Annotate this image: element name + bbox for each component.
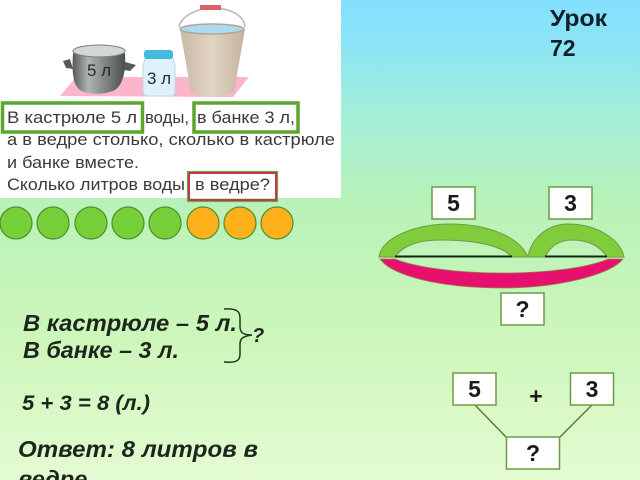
lesson title: Урок: [550, 5, 608, 31]
plus sign: +: [529, 383, 543, 409]
highlight: pot quantity: [2, 103, 142, 132]
task text: в банке 3 л,: [197, 108, 295, 127]
highlight: bucket question: [188, 172, 278, 202]
task text: воды,: [145, 108, 189, 127]
diagram: number bond: [453, 373, 614, 469]
highlight: jar quantity: [194, 103, 298, 132]
panel: task illustration and text: [0, 0, 341, 202]
icon: pot: [63, 45, 136, 94]
box 5: 5: [468, 376, 481, 402]
task text: в ведре?: [195, 175, 270, 194]
solution text: [23, 310, 237, 363]
box 5: 5: [447, 190, 460, 216]
lesson title: 72: [550, 35, 576, 61]
solution text: В банке – 3 л.: [23, 337, 179, 363]
task text: и банке вместе.: [7, 153, 139, 172]
box 5: [432, 187, 475, 219]
circles counting row: [0, 207, 293, 239]
diagram: segment scheme: [379, 187, 624, 325]
brace with question mark: ?: [252, 325, 264, 347]
connector lines: [475, 405, 592, 437]
left arc: [379, 224, 528, 257]
icon: bucket: [179, 5, 245, 97]
task text: В кастрюле 5 л: [7, 108, 137, 127]
solution text: В кастрюле – 5 л.: [23, 310, 237, 336]
lesson title: [550, 5, 608, 61]
box 3: 3: [564, 190, 577, 216]
task text: а в ведре столько, сколько в кастрюле: [7, 130, 335, 149]
equation: 5 + 3 = 8 (л.): [22, 392, 150, 415]
box question: [506, 437, 560, 469]
box 3: 3: [586, 376, 598, 402]
box 3: [549, 187, 592, 219]
segment lines: [395, 256, 607, 258]
icon: jar: [143, 50, 175, 96]
pink total arc: [380, 259, 623, 288]
icon: jar: 3 л: [147, 69, 171, 88]
pink table surface: [60, 77, 249, 97]
task text: Сколько литров воды: [7, 175, 185, 194]
answer text: [18, 436, 258, 480]
icon: pot: 5 л: [87, 61, 111, 80]
brace with question mark: [224, 309, 264, 362]
box 5: [453, 373, 496, 405]
box question: [501, 293, 544, 325]
task text: [7, 108, 335, 194]
box question: ?: [526, 440, 540, 466]
right arc: [528, 224, 624, 257]
box question: ?: [515, 296, 530, 322]
answer text: Ответ: 8 литров в: [18, 436, 258, 462]
box 3: [570, 373, 614, 405]
